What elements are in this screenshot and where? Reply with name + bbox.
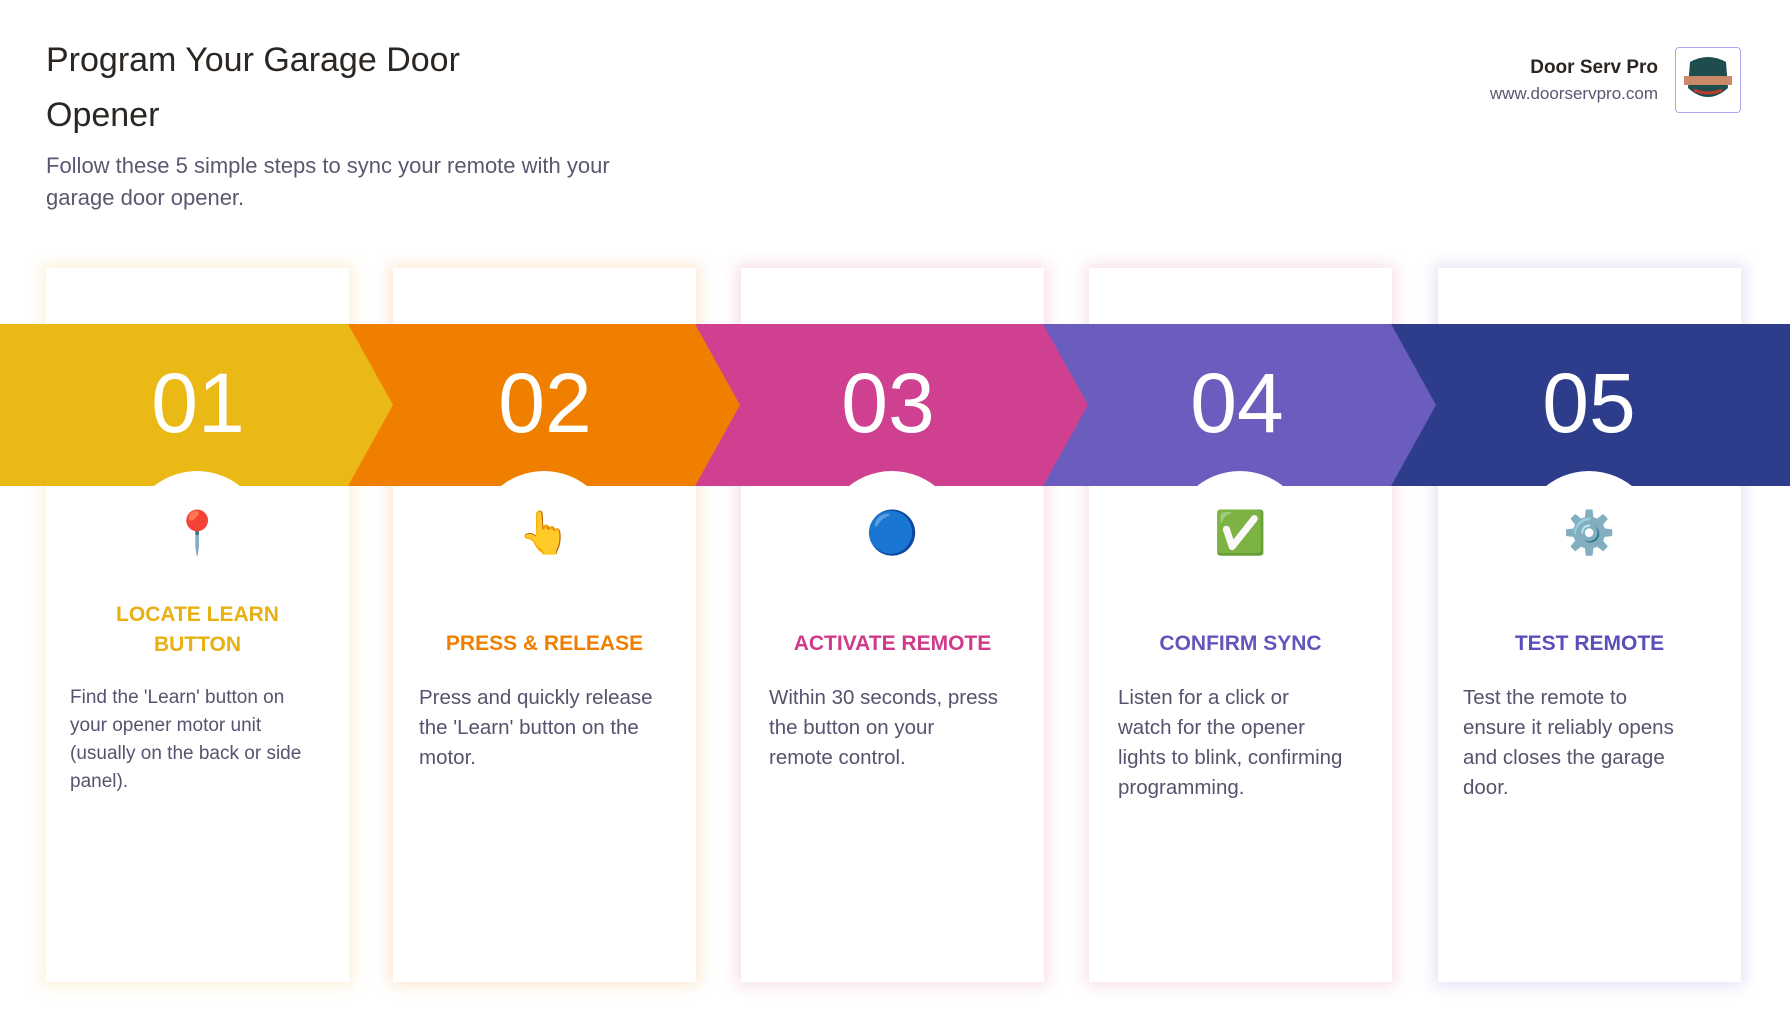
segment 3: 03 — [841, 356, 935, 450]
heading 2: PRESS & RELEASE — [446, 632, 643, 655]
title: Opener — [46, 96, 159, 134]
body 2: motor. — [419, 746, 476, 769]
body 2: the 'Learn' button on the — [419, 716, 639, 739]
icon: pin: 📍 — [171, 508, 224, 557]
heading 5: TEST REMOTE — [1515, 632, 1664, 655]
segment 3 — [695, 324, 1088, 486]
heading 1: BUTTON — [154, 633, 241, 656]
body 2 — [419, 686, 653, 769]
body 2: Press and quickly release — [419, 686, 653, 709]
body 3: the button on your — [769, 716, 934, 739]
icon: check: ✅ — [1214, 508, 1267, 557]
card 4 — [1089, 268, 1392, 982]
card 1 — [46, 268, 349, 982]
segment 2 — [348, 324, 740, 486]
icon: gear: ⚙️ — [1563, 508, 1616, 557]
body 3 — [769, 686, 998, 769]
icon: logo — [1675, 47, 1741, 113]
segment 1 — [0, 324, 393, 486]
body 5 — [1463, 686, 1674, 799]
body 1: panel). — [70, 771, 128, 792]
heading 4: CONFIRM SYNC — [1159, 632, 1322, 655]
card 5 — [1438, 268, 1741, 982]
segment 4 — [1043, 324, 1436, 486]
icon: pointing hand: 👆 — [518, 508, 571, 557]
segment 1: 01 — [151, 356, 245, 450]
body 1 — [70, 687, 301, 792]
card 2 — [393, 268, 696, 982]
body 5: and closes the garage — [1463, 746, 1665, 769]
segment 4: 04 — [1190, 356, 1284, 450]
title — [46, 41, 460, 134]
body 4 — [1118, 686, 1342, 799]
body 1: your opener motor unit — [70, 715, 261, 736]
segment 2: 02 — [498, 356, 592, 450]
body 1: Find the 'Learn' button on — [70, 687, 284, 708]
brand text — [1490, 57, 1658, 103]
body 5: door. — [1463, 776, 1509, 799]
card 3 — [741, 268, 1044, 982]
body 3: remote control. — [769, 746, 906, 769]
heading 1 — [116, 603, 279, 656]
body 4: Listen for a click or — [1118, 686, 1289, 709]
title: Program Your Garage Door — [46, 41, 460, 79]
heading 1: LOCATE LEARN — [116, 603, 279, 626]
subtitle: Follow these 5 simple steps to sync your remote with your garage door opener. — [46, 153, 610, 210]
segment 5: 05 — [1542, 356, 1636, 450]
body 1: (usually on the back or side — [70, 743, 301, 764]
body 4: lights to blink, confirming — [1118, 746, 1342, 769]
body 4: programming. — [1118, 776, 1244, 799]
body 3: Within 30 seconds, press — [769, 686, 998, 709]
brand text: www.doorservpro.com — [1490, 84, 1658, 103]
body 4: watch for the opener — [1118, 716, 1305, 739]
brand text: Door Serv Pro — [1530, 57, 1658, 78]
icon: button: 🔵 — [866, 508, 919, 557]
body 5: ensure it reliably opens — [1463, 716, 1674, 739]
heading 3: ACTIVATE REMOTE — [794, 632, 991, 655]
body 5: Test the remote to — [1463, 686, 1627, 709]
segment 5 — [1391, 324, 1790, 486]
icon notches — [128, 471, 1658, 609]
